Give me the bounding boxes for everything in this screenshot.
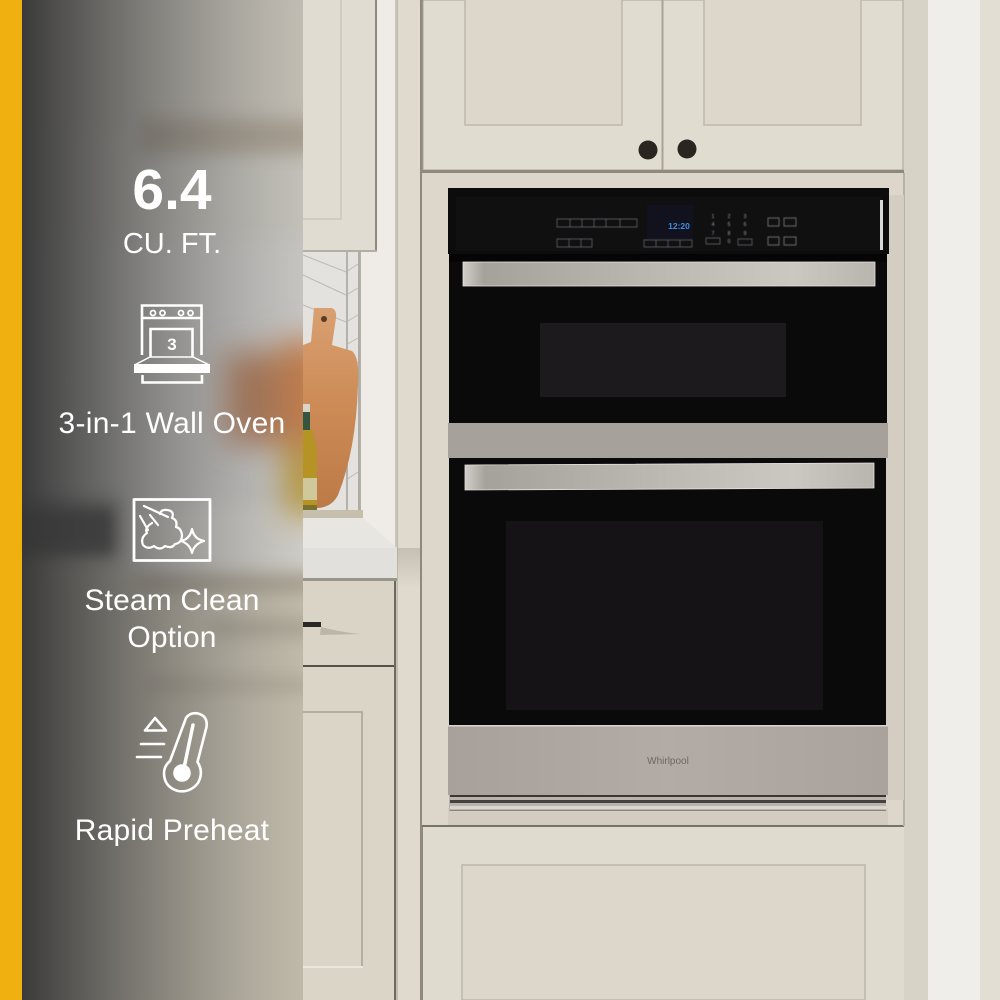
oil bottle — [303, 404, 317, 519]
lower cabinet drawer — [423, 827, 903, 1000]
icon: 3-in-1 oven — [134, 306, 210, 382]
capacity stat — [123, 158, 221, 260]
label: 3-in-1 wall oven: 3-in-1 Wall Oven — [58, 407, 286, 440]
steel kick panel — [448, 725, 888, 795]
control panel: 5 — [728, 222, 731, 228]
lower left drawer and door — [303, 581, 396, 1000]
upper handle — [463, 262, 875, 286]
label: steam clean option: Steam Clean — [84, 584, 260, 617]
yellow accent bar — [0, 0, 22, 1000]
panel: frosted feature sidebar — [0, 0, 303, 1000]
control panel: 12:20 — [668, 221, 690, 231]
control panel: 3 — [744, 214, 747, 220]
control panel: 4 — [712, 222, 715, 228]
tile backsplash — [303, 252, 361, 514]
countertop — [303, 510, 397, 581]
control panel: 1 — [712, 214, 715, 220]
cutting board — [303, 308, 358, 510]
dark gradient overlay — [22, 0, 303, 1000]
left wall niche — [360, 0, 423, 1000]
upper cabinet doors — [423, 0, 904, 173]
oven surround frame — [422, 173, 905, 827]
control panel — [448, 188, 889, 254]
capacity stat: 6.4 — [132, 158, 212, 222]
control panel: 0 — [728, 239, 731, 245]
control panel: 6 — [744, 222, 747, 228]
upper left cabinet — [303, 0, 377, 252]
frosted blurred kitchen backdrop — [27, 0, 303, 1000]
right wall — [904, 0, 1000, 1000]
icon: rapid preheat thermometer — [137, 713, 207, 791]
control panel: 9 — [744, 231, 747, 237]
control panel: 2 — [728, 214, 731, 220]
wall oven — [448, 188, 889, 811]
steel divider — [448, 423, 888, 458]
capacity stat: CU. FT. — [123, 228, 221, 260]
control panel: 7 — [712, 231, 715, 237]
icon: 3-in-1 oven: 3 — [167, 335, 177, 354]
icon: steam clean — [134, 500, 210, 560]
label: steam clean option: Option — [127, 621, 217, 654]
label: rapid preheat: Rapid Preheat — [75, 814, 270, 847]
steel kick panel: Whirlpool — [647, 756, 689, 767]
upper microwave door — [449, 254, 887, 423]
cabinet knobs — [638, 140, 696, 160]
vent strip — [449, 795, 886, 811]
control panel: 8 — [728, 231, 731, 237]
label: steam clean option — [84, 584, 260, 654]
lower oven door — [449, 458, 886, 725]
lower handle — [465, 463, 874, 490]
